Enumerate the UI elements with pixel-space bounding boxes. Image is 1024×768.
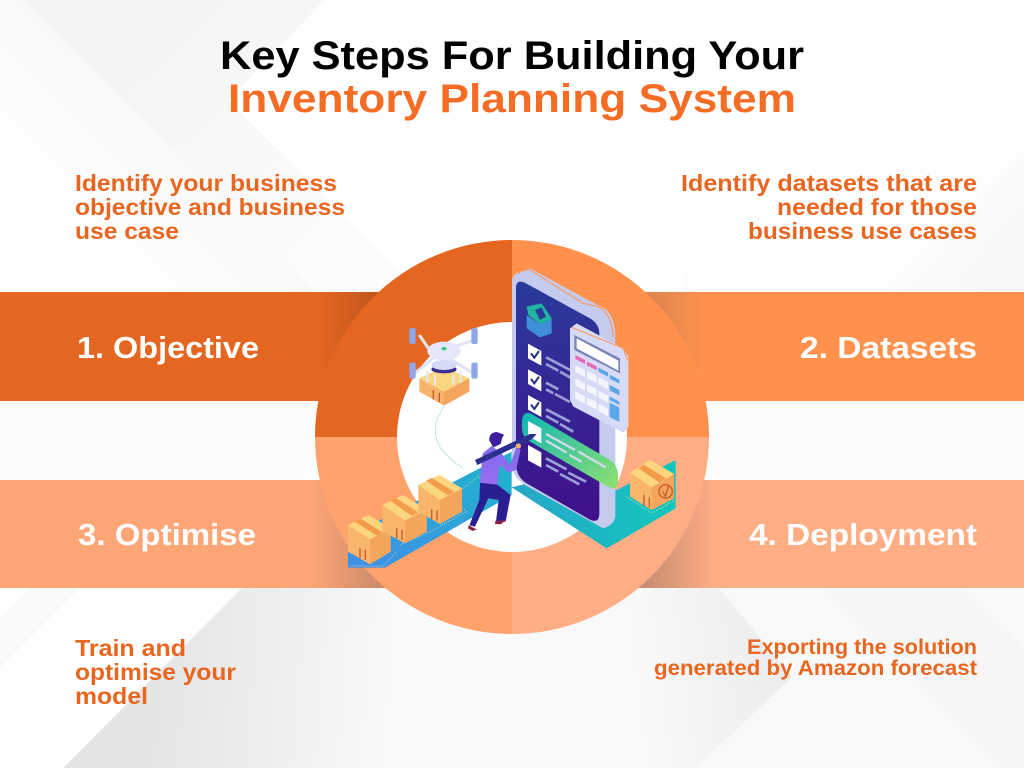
text block: deployment description: Exporting the solution xyxy=(747,635,977,659)
band: 3. Optimise: 3. Optimise xyxy=(78,517,256,552)
ring diagram xyxy=(315,240,709,634)
icon: open box logo xyxy=(527,303,552,337)
text block: objective description: use case xyxy=(75,218,179,244)
text block: datasets description: needed for those xyxy=(777,194,977,220)
band: 1. Objective xyxy=(0,292,400,401)
illustration: inventory app xyxy=(348,268,676,568)
text block: objective description xyxy=(75,170,345,244)
title: Key Steps For Building Your xyxy=(220,34,804,78)
head xyxy=(489,432,504,447)
band: 3. Optimise xyxy=(0,480,400,588)
calculator xyxy=(570,323,628,433)
text block: optimise description: Train and xyxy=(75,635,186,661)
text block: datasets description xyxy=(681,170,977,244)
text block: datasets description: business use cases xyxy=(748,218,977,244)
text block: objective description: objective and business xyxy=(75,194,345,220)
torso and arm xyxy=(480,446,521,485)
legs xyxy=(469,483,511,527)
drone with package xyxy=(409,328,478,468)
band: 4. Deployment: 4. Deployment xyxy=(749,517,977,552)
title: Inventory Planning System xyxy=(228,77,796,121)
cardboard boxes on conveyor xyxy=(348,460,674,564)
text block: datasets description: Identify datasets that are xyxy=(681,170,977,196)
shoes xyxy=(468,520,506,531)
text block: objective description: Identify your business xyxy=(75,170,337,196)
person with pencil xyxy=(468,432,537,531)
band: 1. Objective: 1. Objective xyxy=(77,330,259,365)
text block: optimise description: optimise your xyxy=(75,659,236,685)
phone xyxy=(512,268,615,528)
conveyor belt: left xyxy=(348,452,512,568)
text block: optimise description: model xyxy=(75,683,148,709)
band: 2. Datasets: 2. Datasets xyxy=(800,330,977,365)
highlighted list item xyxy=(522,413,618,488)
hand xyxy=(516,443,521,449)
title xyxy=(220,34,804,121)
conveyor belt: right xyxy=(512,460,676,548)
text block: optimise description xyxy=(75,635,236,709)
band: 2. Datasets xyxy=(624,292,1024,401)
text block: deployment description: generated by Amazon forecast xyxy=(654,656,977,680)
checklist xyxy=(528,344,586,484)
pencil xyxy=(475,434,537,465)
text block: deployment description xyxy=(654,635,977,680)
band: 4. Deployment xyxy=(624,480,1024,588)
